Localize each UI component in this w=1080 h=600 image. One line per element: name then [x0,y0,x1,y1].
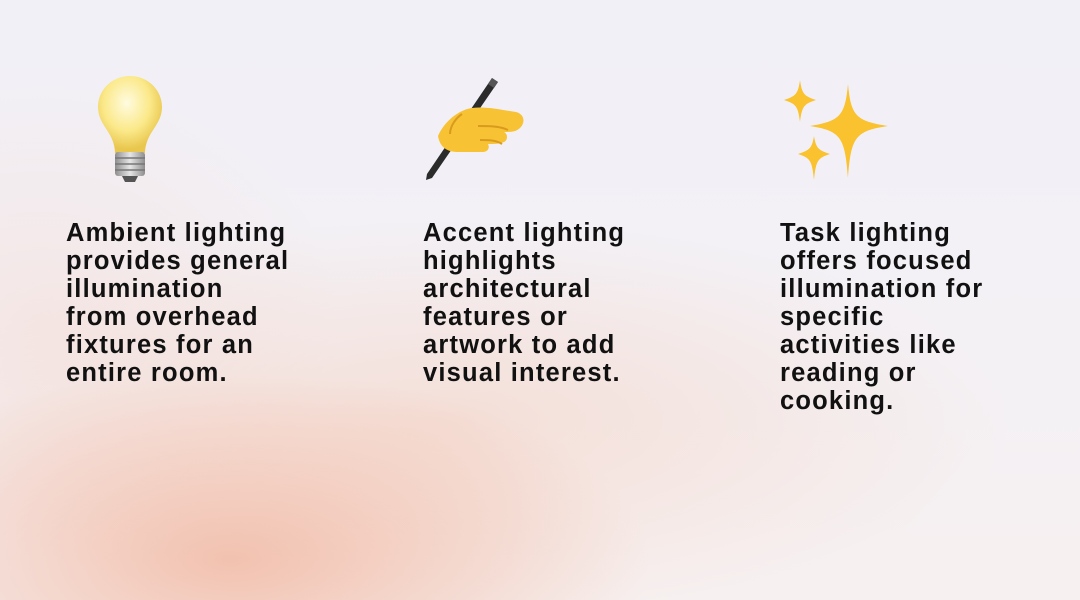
text: task lighting: offers focused [780,247,972,275]
icon: sparkles [784,80,888,180]
icon: light bulb [98,76,162,182]
text: task lighting: Task lighting [780,219,951,247]
text: accent lighting: features or [423,303,568,331]
text: accent lighting: Accent lighting [423,219,625,247]
text: accent lighting: architectural [423,275,592,303]
text: ambient lighting [66,219,289,387]
text: accent lighting [423,219,625,387]
text: accent lighting: artwork to add [423,331,616,359]
text: ambient lighting: Ambient lighting [66,219,286,247]
text: task lighting: reading or [780,359,917,387]
text: accent lighting: highlights [423,247,557,275]
text: task lighting: illumination for [780,275,983,303]
text: ambient lighting: illumination [66,275,223,303]
text: ambient lighting: from overhead [66,303,259,331]
text: accent lighting: visual interest. [423,359,621,387]
text: ambient lighting: fixtures for an [66,331,254,359]
icon: writing hand [426,78,524,180]
text: ambient lighting: entire room. [66,359,228,387]
text: task lighting: cooking. [780,387,894,415]
text: task lighting: activities like [780,331,957,359]
text: ambient lighting: provides general [66,247,289,275]
text: task lighting [780,219,983,415]
text: task lighting: specific [780,303,885,331]
